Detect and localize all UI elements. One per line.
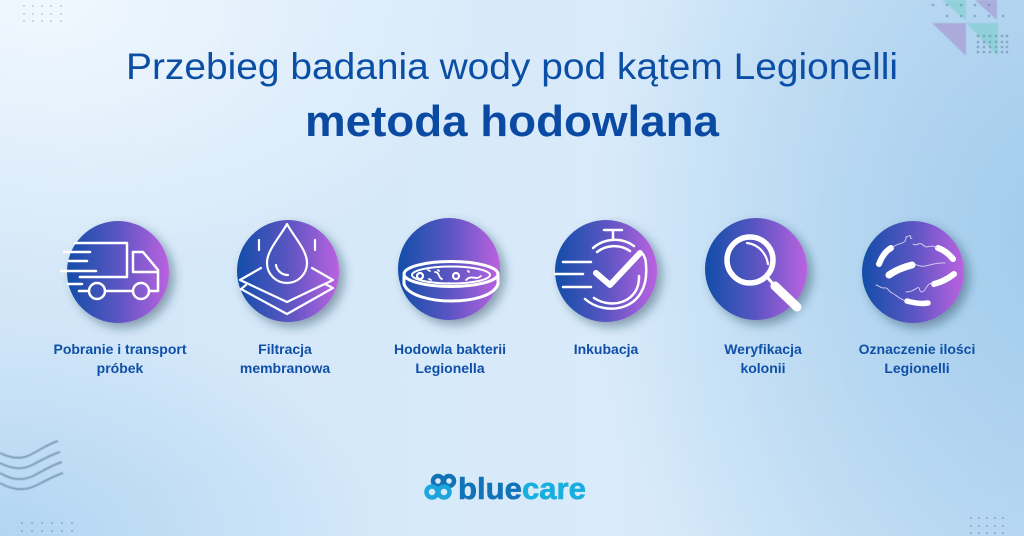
decoration: wavy lines <box>0 441 63 489</box>
circle 6 <box>862 221 964 323</box>
label 6: Legionelli <box>884 360 950 376</box>
panel: step 5 verification <box>705 218 807 376</box>
icon: legionella bacteria <box>876 236 954 303</box>
panel: step 3 culture <box>394 218 506 376</box>
decoration: bottom-right dot grid <box>970 517 1004 534</box>
label 3: Hodowla bakterii <box>394 341 506 357</box>
circle 3 <box>398 218 500 320</box>
logo: bluecare <box>426 471 586 506</box>
icon: truck <box>61 243 158 299</box>
title <box>126 46 898 146</box>
panel: step 1 transport <box>53 221 187 376</box>
circle 2 <box>237 220 339 322</box>
label 4: Inkubacja <box>574 341 638 357</box>
label 6: Oznaczenie ilości <box>859 341 975 357</box>
icon: drop on membrane <box>240 224 333 314</box>
logo mark <box>426 476 454 498</box>
icon: stopwatch <box>555 230 646 309</box>
circle 4 <box>555 220 657 322</box>
panel: step 4 incubation <box>555 220 657 357</box>
icon: magnifier <box>727 237 797 307</box>
logo wordmark: bluecare <box>458 471 586 506</box>
circle 1 <box>67 221 169 323</box>
decoration: top-right triangles <box>932 0 1008 56</box>
circle 5 <box>705 218 807 320</box>
title: Przebieg badania wody pod kątem Legionelli <box>126 46 898 87</box>
label 2: Filtracja <box>258 341 312 357</box>
decoration: bottom-left dot grid <box>21 522 73 532</box>
label 5: kolonii <box>740 360 786 376</box>
label 1: próbek <box>97 360 144 376</box>
label 2: membranowa <box>240 360 330 376</box>
decoration: top-left dot grid <box>23 5 62 22</box>
label 3: Legionella <box>415 360 485 376</box>
title: metoda hodowlana <box>305 97 720 146</box>
icon: petri dish <box>404 262 498 301</box>
label 1: Pobranie i transport <box>53 341 187 357</box>
label 5: Weryfikacja <box>724 341 802 357</box>
panel: step 6 quantification <box>859 221 975 376</box>
panel: step 2 filtration <box>237 220 339 376</box>
